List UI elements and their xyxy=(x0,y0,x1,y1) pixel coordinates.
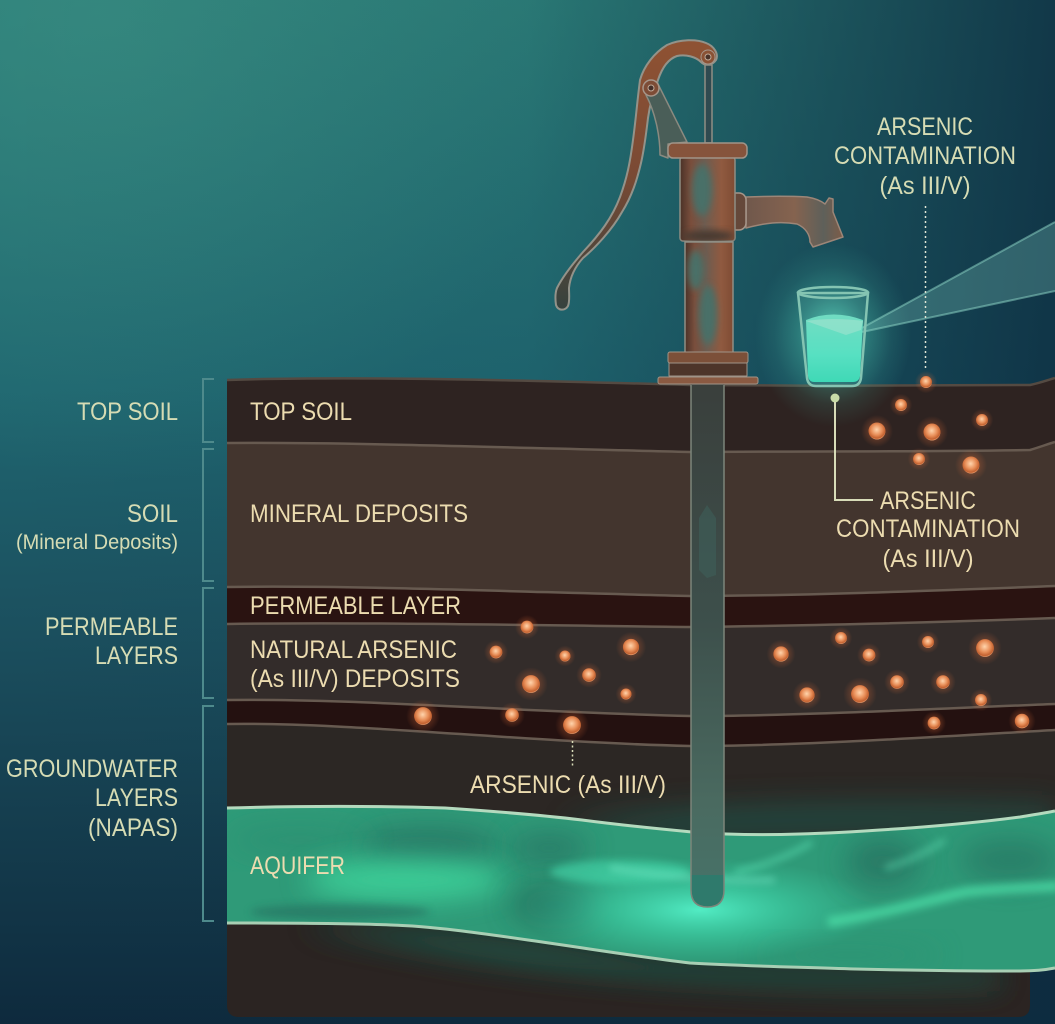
bracket: top soil xyxy=(203,379,214,442)
callout: arsenic contamination below: ARSENIC xyxy=(880,487,976,515)
layer: dark band xyxy=(227,700,1055,746)
callout: arsenic contamination above: (As III/V) xyxy=(880,172,970,200)
label: groundwater layers xyxy=(6,755,178,842)
panel: soil cross-section xyxy=(227,378,1055,1017)
label: natural arsenic deposits: (As III/V) DEPOSITS xyxy=(250,665,460,693)
glowing water glass xyxy=(755,222,1055,427)
aquifer light streaks xyxy=(230,828,1055,965)
layer: base ground xyxy=(227,900,1030,1017)
layer: aquifer xyxy=(227,806,1055,971)
label: groundwater layers: LAYERS xyxy=(95,784,178,812)
hand pump xyxy=(555,40,843,384)
label: groundwater layers: (NAPAS) xyxy=(88,814,178,842)
pump column xyxy=(685,242,733,353)
bracket: soil xyxy=(203,449,214,581)
pump base xyxy=(658,352,758,384)
arsenic particles: left cluster xyxy=(406,615,646,742)
left labels xyxy=(6,398,178,842)
well pipe xyxy=(691,380,724,907)
label: mineral deposits: (Mineral Deposits) xyxy=(16,531,178,554)
label: aquifer: AQUIFER xyxy=(250,852,345,880)
aquifer bottom edge xyxy=(227,923,1055,971)
label: mineral deposits layer: MINERAL DEPOSITS xyxy=(250,500,468,528)
arsenic particles: top soil cluster xyxy=(861,371,993,481)
light beam xyxy=(860,222,1055,332)
layer: lower soil xyxy=(227,724,1055,845)
callout: arsenic in soil: ARSENIC (As III/V) xyxy=(470,771,666,799)
layer: mineral deposits xyxy=(227,442,1055,596)
layer: permeable layer xyxy=(227,586,1055,627)
callout: arsenic contamination below: (As III/V) xyxy=(882,545,974,573)
label: top soil: TOP SOIL xyxy=(77,398,178,426)
pivots xyxy=(643,50,715,96)
arsenic particles: right cluster xyxy=(767,627,1036,735)
glass outline xyxy=(798,293,868,386)
aquifer top edge xyxy=(227,806,1055,835)
label: permeable layers xyxy=(45,613,178,670)
label: natural arsenic deposits: NATURAL ARSENIC xyxy=(250,636,457,664)
bracket: permeable xyxy=(203,588,214,698)
callout: arsenic contamination below: CONTAMINATION xyxy=(836,515,1020,543)
pump cap xyxy=(668,143,747,158)
layer: top soil xyxy=(227,378,1055,452)
layer boundary lines xyxy=(227,378,1055,746)
label: permeable layers: PERMEABLE xyxy=(45,613,178,641)
pump handle xyxy=(555,40,717,310)
label: top soil layer: TOP SOIL xyxy=(250,398,352,426)
callout: arsenic contamination above: ARSENIC xyxy=(877,113,973,141)
pump spout xyxy=(746,196,843,247)
callout: arsenic contamination above xyxy=(834,113,1016,370)
glass water xyxy=(806,314,863,382)
pump cylinder xyxy=(680,157,735,242)
label: groundwater layers: GROUNDWATER xyxy=(6,755,178,783)
pump rod xyxy=(705,65,712,143)
label: natural arsenic deposits xyxy=(250,636,460,693)
callout: arsenic contamination below xyxy=(830,394,1020,573)
left bracket labels xyxy=(203,379,214,921)
stratum labels xyxy=(250,398,468,880)
layer: natural arsenic deposits xyxy=(227,618,1055,716)
label: permeable layers: LAYERS xyxy=(95,642,178,670)
label: permeable layer: PERMEABLE LAYER xyxy=(250,592,461,620)
callout: arsenic contamination above: CONTAMINATION xyxy=(834,142,1016,170)
bracket: groundwater xyxy=(203,706,214,921)
pump pivot arm xyxy=(646,82,687,158)
layer: green glow under aquifer xyxy=(300,925,1000,987)
label: soil: SOIL xyxy=(127,500,178,528)
